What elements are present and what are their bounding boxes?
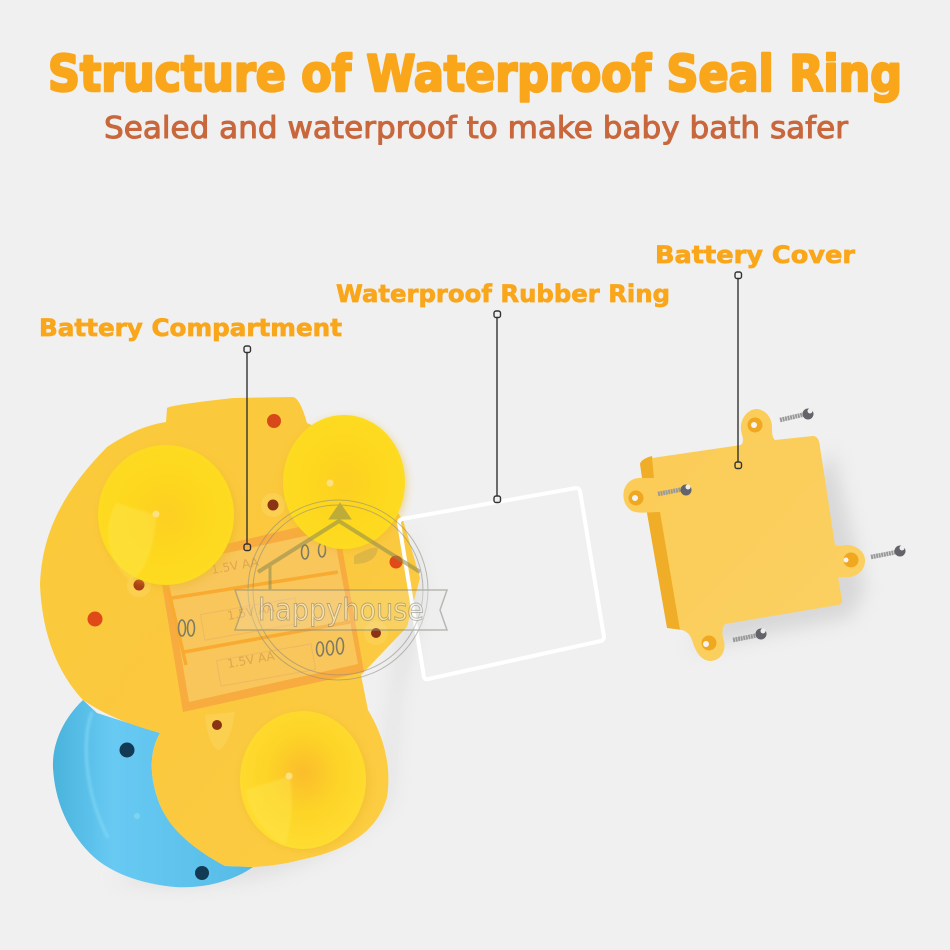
battery compartment: 1.5V AA: [226, 649, 276, 671]
blue shell: [53, 700, 253, 887]
label: waterproof rubber ring: Waterproof Rubber Ring: [336, 280, 670, 308]
waterproof rubber ring: [399, 488, 604, 679]
blue shell highlight: [86, 712, 108, 838]
label: battery compartment: Battery Compartment: [39, 314, 342, 342]
leader line: [735, 272, 742, 468]
leader line: [244, 346, 250, 550]
mounting holes: [628, 418, 858, 650]
cup bottom: [240, 711, 369, 851]
subtitle: Sealed and waterproof to make baby bath safer: [104, 111, 849, 146]
leader line: [494, 311, 500, 502]
cup top right: [283, 415, 407, 551]
screw holes: [88, 414, 402, 730]
yellow body: [40, 397, 420, 867]
watermark: happyhouse: [235, 500, 447, 680]
battery cover: [623, 409, 866, 661]
watermark: happyhouse: happyhouse: [258, 593, 424, 628]
body shadow: [110, 520, 425, 887]
cover edge: [640, 456, 682, 630]
cup left: [98, 445, 237, 588]
label: waterproof rubber ring: [336, 280, 670, 502]
product: duck toy back: [40, 397, 425, 887]
battery compartment: [158, 518, 364, 712]
blue shell holes: [120, 742, 209, 880]
suction cups: [98, 415, 407, 851]
screw bosses: [127, 493, 388, 750]
label: battery cover: Battery Cover: [655, 241, 855, 269]
battery compartment: 1.5V AA: [210, 555, 260, 577]
label: battery compartment: [39, 314, 342, 550]
cover shadow: [690, 450, 866, 650]
battery labels: 1.5V AA: [226, 601, 276, 623]
screws: [658, 408, 906, 640]
label: battery cover: [655, 241, 855, 468]
cover plate: [623, 409, 865, 661]
springs: [178, 543, 344, 656]
